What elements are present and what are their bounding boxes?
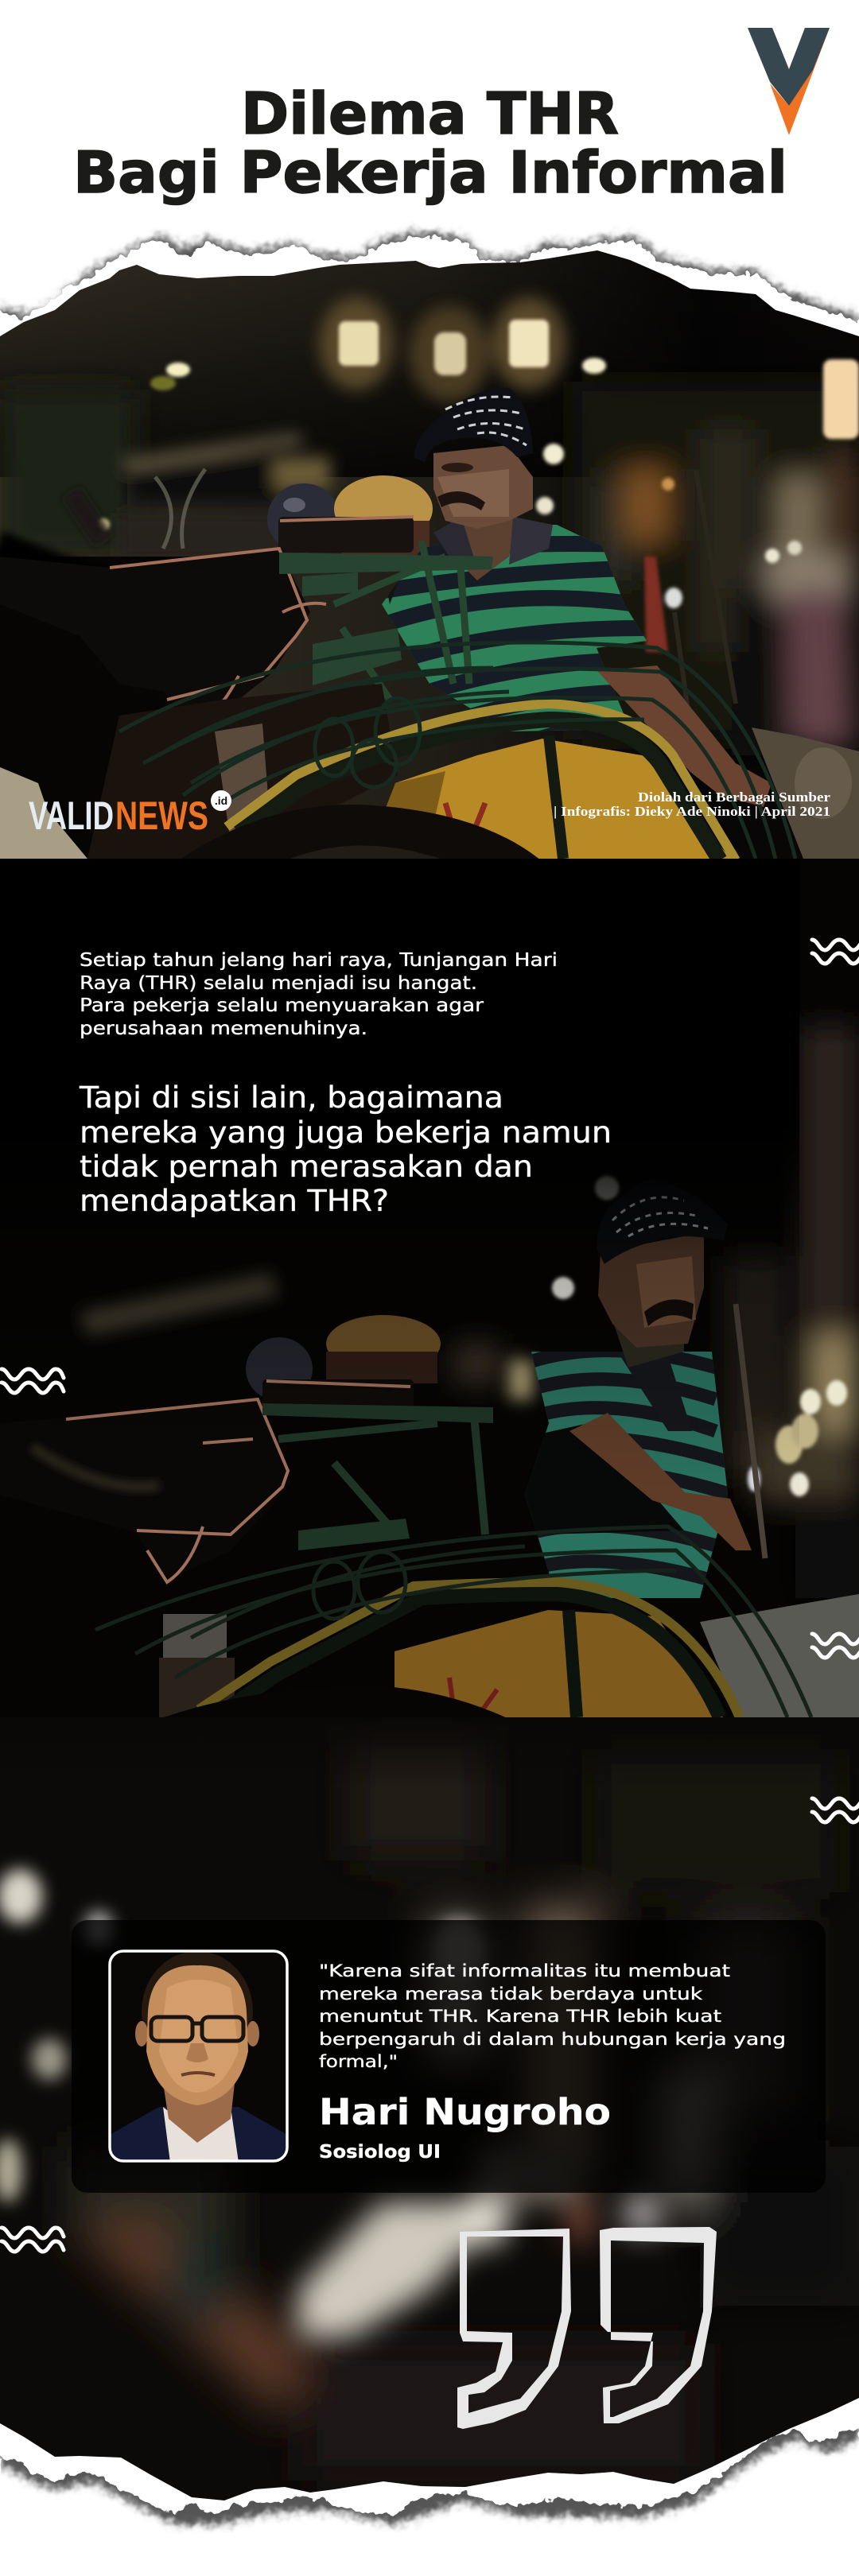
headlight (163, 1614, 227, 1658)
title: Dilema THR (241, 80, 619, 147)
face (433, 445, 533, 529)
icon: wave section three right (812, 1798, 859, 1822)
panel: second becak photo (0, 859, 859, 1719)
credit line (554, 789, 831, 819)
intro question: mendapatkan THR? (80, 1184, 389, 1218)
quote text (319, 1961, 786, 2072)
speaker name: Hari Nugroho (319, 2091, 611, 2133)
Validnews wordmark (29, 790, 231, 830)
credit line: | Infografis: Dieky Ade Ninoki | April 2021 (554, 804, 830, 819)
seat (0, 1399, 290, 1582)
yellow panel (374, 739, 731, 859)
woven wire basket (119, 642, 795, 859)
shirt (525, 1352, 728, 1598)
arched frame of the becak (227, 704, 736, 860)
arm and hand (569, 1413, 752, 1550)
icon: wave lower right (812, 1634, 859, 1658)
wire basket (95, 1527, 811, 1717)
credit line: Diolah dari Berbagai Sumber (638, 789, 831, 805)
panel: quote card (72, 1920, 826, 2193)
panel: hero photo of becak driver (0, 239, 859, 860)
neck (612, 1320, 684, 1368)
quote text: menuntut THR. Karena THR lebih kuat (319, 2007, 721, 2027)
Validnews wordmark: NEWS (115, 793, 208, 838)
speaker role: Sosiolog UI (319, 2142, 441, 2163)
intro question: tidak pernah merasakan dan (80, 1150, 533, 1184)
intro paragraph: perusahaan memenuhinya. (80, 1018, 367, 1039)
Validnews wordmark: .id (215, 794, 227, 807)
intro question: mereka yang juga bekerja namun (80, 1115, 612, 1150)
icon: wave left (2, 1369, 64, 1393)
panel: blurred quote section background (0, 1717, 859, 2512)
torn paper edge: top (0, 232, 859, 350)
green frame bars (279, 553, 493, 685)
yellow panel (395, 1610, 723, 1717)
quote text: formal," (319, 2052, 398, 2072)
pole (736, 1304, 765, 1558)
panel: intro section background (0, 859, 859, 1717)
wheel (179, 805, 541, 860)
helmet and hair (246, 1337, 313, 1401)
intro paragraph: Raya (THR) selalu menjadi isu hangat. (80, 973, 477, 994)
icon: closing quotation marks (457, 2227, 717, 2429)
cap (597, 1180, 728, 1264)
fade to black (0, 859, 799, 1495)
portrait of Hari Nugroho (110, 1951, 287, 2163)
title (73, 80, 787, 206)
intro paragraph (80, 950, 558, 1039)
shirt (382, 525, 647, 731)
quote text: berpengaruh di dalam hubungan kerja yang (319, 2030, 786, 2050)
handlebars and seat (0, 487, 113, 557)
blurred street background (0, 382, 859, 755)
green frame bars (262, 1403, 493, 1550)
icon: Validnews V logo (748, 28, 830, 135)
grey cloth (700, 1594, 859, 1717)
neck and collar (464, 517, 517, 580)
quote text: mereka merasa tidak berdaya untuk (319, 1984, 703, 2004)
rickshaw body behind basket (87, 684, 398, 859)
title: Bagi Pekerja Informal (73, 139, 787, 206)
intro question: Tapi di sisi lain, bagaimana (79, 1080, 503, 1115)
intro paragraph: Para pekerja selalu menyuarakan agar (80, 995, 484, 1016)
handlebar highlight (32, 1447, 159, 1487)
Validnews wordmark: VALID (29, 793, 114, 838)
torn paper edge: bottom (0, 2385, 859, 2524)
arm (597, 665, 772, 807)
icon: wave top right (812, 940, 859, 964)
wheel (159, 1686, 509, 1719)
quote text: "Karena sifat informalitas itu membuat (319, 1961, 730, 1981)
street lamps and lights (97, 320, 859, 652)
helmet and neighbour's hair (267, 483, 340, 553)
intro question (79, 1080, 612, 1218)
poles (674, 471, 736, 739)
frame (199, 1582, 740, 1717)
icon: wave section three left (2, 2228, 64, 2252)
stone wall and lower-left glare (752, 727, 859, 859)
face (598, 1232, 704, 1348)
intro paragraph: Setiap tahun jelang hari raya, Tunjangan Hari (80, 950, 558, 971)
cap (414, 388, 533, 463)
